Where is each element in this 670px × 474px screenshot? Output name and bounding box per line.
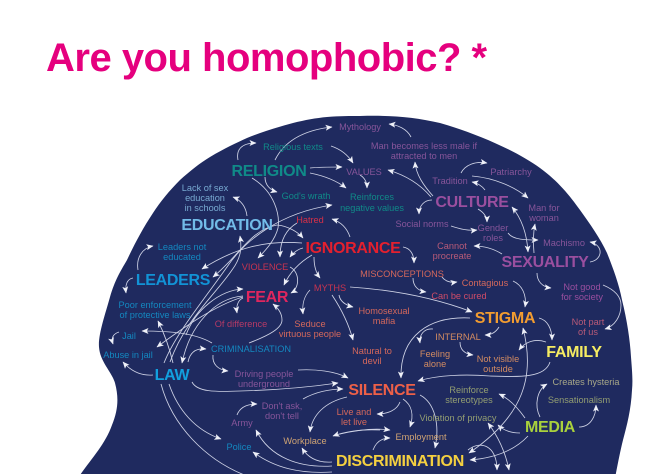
label: reinforces negative values: Reinforces (350, 192, 394, 202)
arrow: internal to not visible (460, 342, 473, 355)
label: violence: VIOLENCE (242, 262, 288, 272)
title: Are you homophobic? * (46, 36, 488, 80)
arrow: sexuality to not part of us (603, 285, 621, 329)
label: man for woman: woman (528, 213, 559, 223)
arrow: myths to seduce (303, 290, 310, 314)
arrow: ignorance to leaders (202, 242, 302, 269)
arrow: ignorance to misconceptions (403, 247, 414, 263)
arrow: media to sensationalism (579, 405, 596, 427)
label: cannot procreate: Cannot (437, 241, 467, 251)
arrow: tradition to patriarchy (461, 162, 487, 173)
arrow: silence to discrimination (420, 395, 437, 448)
arrow: discrimination to workplace (302, 448, 332, 462)
label: gender roles: Gender (478, 223, 508, 233)
label: homosexual mafia: Homosexual (358, 306, 410, 316)
arrow: sexuality to machismo loop (590, 242, 600, 262)
label: feeling alone: Feeling (420, 349, 450, 359)
arrow: misconceptions to can be cured (413, 278, 426, 292)
arrow: internal to feeling alone (420, 329, 433, 343)
arrow: culture to social norms (419, 200, 432, 214)
arrow: culture to man becomes (415, 162, 433, 196)
arrow: ignorance to fear (284, 255, 312, 285)
arrow: sexuality to not good for society (537, 273, 551, 288)
label: god's wrath: God's wrath (282, 191, 330, 201)
label: not part of us: Not part (572, 317, 605, 327)
arrow: religion to values (310, 167, 342, 168)
arrow: sexuality to cannot procreate (474, 246, 502, 254)
heading: sexuality: SEXUALITY (501, 254, 589, 271)
arrow: ignorance to hatred (332, 219, 350, 237)
arrow: law to reinforces (164, 205, 332, 363)
heading: silence: SILENCE (348, 382, 416, 399)
label: homosexual mafia (358, 306, 410, 326)
label: creates hysteria: Creates hysteria (553, 377, 620, 387)
arrow: silence to live and let live (377, 402, 400, 414)
label: can be cured: Can be cured (431, 291, 487, 301)
label: not part of us: of us (578, 327, 598, 337)
label: not visible outside (477, 354, 519, 374)
label: driving people underground (235, 369, 293, 389)
arrow: media to violation of privacy (498, 425, 520, 433)
label: lack of sex education: in schools (185, 203, 226, 213)
label: feeling alone: alone (424, 359, 446, 369)
arrow: contagious to stigma (513, 281, 525, 307)
label: live and let live: let live (341, 417, 367, 427)
arrow: sexuality to man for woman (533, 224, 535, 253)
label: workplace: Workplace (283, 436, 327, 446)
arrow: law to poor enforcement (158, 321, 173, 363)
arrow: family to silence (418, 362, 550, 381)
label: criminalisation: CRIMINALISATION (211, 344, 291, 354)
label: abuse in jail: Abuse in jail (103, 350, 153, 360)
arrow: gender roles to machismo (508, 233, 538, 240)
heading: media: MEDIA (525, 419, 576, 436)
heading: family: FAMILY (546, 344, 602, 361)
label: live and let live (337, 407, 371, 427)
label: man becomes less male: attracted to men (391, 151, 457, 161)
arrow: tradition to man for woman (472, 176, 528, 198)
label: man for woman: Man for (528, 203, 560, 213)
arrow: criminalisation to fear (249, 304, 282, 343)
heading: culture: CULTURE (435, 194, 509, 211)
heading: fear: FEAR (246, 289, 289, 306)
arrow: law to police (169, 384, 221, 439)
arrow: culture to gender roles (478, 209, 487, 222)
arrow: culture to tradition (472, 182, 485, 190)
arrow: media to discrimination (470, 436, 528, 460)
arrow: law to abuse in jail (123, 362, 153, 375)
label: man for woman (528, 203, 560, 223)
label: social norms: Social norms (395, 219, 449, 229)
arrow: law to off page (161, 384, 247, 474)
arrow: hatred to violence (280, 223, 297, 257)
arrow: media to creates hysteria (537, 384, 547, 417)
arrow: law to criminalisation (188, 349, 206, 362)
label: reinforce stereotypes: stereotypes (445, 395, 493, 405)
heading: religion: RELIGION (232, 163, 306, 180)
label: not visible outside: outside (483, 364, 513, 374)
label: myths: MYTHS (314, 283, 346, 293)
label: live and let live: Live and (337, 407, 371, 417)
arrow: discrimination to police (253, 452, 332, 472)
label: natural to devil: devil (363, 356, 381, 366)
arrow: ignorance to myths (314, 257, 320, 278)
arrow: culture to values (388, 170, 431, 197)
arrow: myths to stigma (350, 287, 472, 312)
arrow: man becomes to mythology (389, 124, 411, 137)
arrow: stigma to discrimination double headed (469, 328, 528, 453)
arrow: myths to homosexual mafia (339, 295, 353, 307)
heading: education: EDUCATION (181, 217, 273, 234)
label: leaders not educated: Leaders not (158, 242, 207, 252)
label: natural to devil (352, 346, 392, 366)
arrow: family to not visible (519, 340, 546, 350)
arrow: silence to workplace (310, 397, 347, 432)
label: seduce virtuous people (279, 319, 341, 339)
arrow: leaders to poor enforcement (126, 278, 133, 293)
arrow: criminalisation to jail (142, 331, 212, 343)
label: reinforce stereotypes (445, 385, 493, 405)
arrow: education to lack of sex education (233, 197, 247, 216)
label: religious texts: Religious texts (263, 142, 323, 152)
arrow: religious texts to values (331, 146, 353, 163)
arrow: media to reinforce stereotypes (499, 394, 525, 418)
arrow: violation of privacy to off page (488, 423, 509, 470)
label: natural to devil: Natural to (352, 346, 392, 356)
arrow: religion to violence (252, 178, 278, 258)
label: of difference: Of difference (215, 319, 267, 329)
arrow: religion to reinforces (310, 173, 346, 188)
arrow: religion to god's wrath (265, 177, 277, 192)
heading: leaders: LEADERS (136, 272, 211, 289)
label: misconceptions: MISCONCEPTIONS (360, 269, 444, 279)
label: machismo: Machismo (543, 238, 585, 248)
concept labels (103, 122, 620, 470)
arrow: religion to religious texts (238, 143, 256, 160)
heading: discrimination: DISCRIMINATION (336, 453, 464, 470)
arrow: myths to natural to devil (332, 295, 353, 340)
label: patriarchy: Patriarchy (490, 167, 532, 177)
label: don't ask don't tell (262, 401, 302, 421)
label: poor enforcement: Poor enforcement (118, 300, 192, 310)
arrow: stigma to family (539, 318, 552, 340)
arrow: junction to ignorance (277, 225, 303, 238)
heading: law: LAW (155, 367, 191, 384)
label: poor enforcement: of protective laws (120, 310, 191, 320)
label: sensationalism: Sensationalism (548, 395, 610, 405)
label: lack of sex education: Lack of sex (182, 183, 229, 193)
arrow: ignorance to violence (290, 248, 303, 257)
label: violation of privacy: Violation of privacy (420, 413, 497, 423)
label: values: VALUES (346, 167, 382, 177)
label: poor enforcement (118, 300, 192, 320)
label: man becomes less male: Man becomes less male if (371, 141, 478, 151)
arrow: values to reinforces (360, 175, 367, 188)
arrow: stigma to internal (485, 327, 499, 335)
label: not good for society: for society (561, 292, 603, 302)
label: leaders not educated (158, 242, 207, 262)
label: gender roles (478, 223, 508, 243)
label: driving people underground: Driving people (235, 369, 293, 379)
label: contagious: Contagious (462, 278, 509, 288)
label: mythology: Mythology (339, 122, 381, 132)
arrow: jail to abuse in jail (112, 332, 119, 344)
arrow: law to education (170, 236, 241, 362)
arrow: fear to abuse in jail line (157, 297, 243, 347)
panel: head silhouette (78, 116, 632, 474)
label: jail: Jail (122, 331, 136, 341)
label: not good for society (561, 282, 603, 302)
arrow: fear to law (182, 296, 243, 363)
arrow: leaders to leaders not educated (138, 246, 153, 270)
arrow: junction to leaders (213, 225, 277, 277)
arrow: workplace to employment (340, 429, 390, 434)
arrow: don't ask to silence (303, 389, 343, 399)
label: hatred: Hatred (296, 215, 324, 225)
label: reinforces negative values (340, 192, 404, 213)
label: man becomes less male (371, 141, 478, 161)
label: not good for society: Not good (563, 282, 601, 292)
arrow: silence to employment (403, 399, 412, 427)
arrow: discrimination to army (256, 430, 332, 466)
label: employment: Employment (395, 432, 447, 442)
label: driving people underground: underground (238, 379, 290, 389)
arrow: law up to fear (186, 289, 243, 335)
label: reinforces negative values: negative values (340, 203, 404, 213)
label: feeling alone (420, 349, 450, 369)
label: don't ask don't tell: Don't ask, (262, 401, 302, 411)
label: leaders not educated: educated (163, 252, 201, 262)
arrow: discrimination to employment (373, 438, 390, 450)
label: not part of us (572, 317, 605, 337)
heading: ignorance: IGNORANCE (305, 240, 401, 257)
label: cannot procreate (433, 241, 471, 261)
arrows connecting concepts (112, 124, 621, 474)
heading: stigma: STIGMA (475, 310, 536, 327)
label: seduce virtuous people: Seduce (294, 319, 326, 329)
arrow: religion to mythology (275, 127, 332, 160)
label: lack of sex education: education (185, 193, 225, 203)
label: gender roles: roles (483, 233, 503, 243)
label: tradition: Tradition (432, 176, 468, 186)
label: army: Army (231, 418, 253, 428)
arrow: violence to fear (290, 267, 298, 293)
arrow: social norms to gender roles (451, 226, 477, 230)
label: lack of sex education (182, 183, 229, 213)
arrow: criminalisation to driving people (213, 355, 228, 371)
arrow: army to don't ask (237, 404, 257, 415)
label: cannot procreate: procreate (433, 251, 471, 261)
label: seduce virtuous people: virtuous people (279, 329, 341, 339)
label: homosexual mafia: mafia (373, 316, 396, 326)
arrow: discrimination loop off page (468, 445, 497, 470)
arrow: stigma to silence (401, 318, 470, 378)
arrow: driving people to silence (298, 370, 348, 378)
label: internal: INTERNAL (435, 332, 481, 342)
label: police: Police (226, 442, 252, 452)
arrow: fear to of difference (237, 298, 243, 313)
arrow: employment to workplace (333, 430, 380, 436)
arrow: law to silence (192, 382, 338, 391)
arrow: misconceptions to contagious (442, 277, 457, 282)
label: don't ask don't tell: don't tell (265, 411, 299, 421)
label: not visible outside: Not visible (477, 354, 519, 364)
arrow: sexuality to culture double headed (512, 207, 528, 252)
label: reinforce stereotypes: Reinforce (449, 385, 489, 395)
